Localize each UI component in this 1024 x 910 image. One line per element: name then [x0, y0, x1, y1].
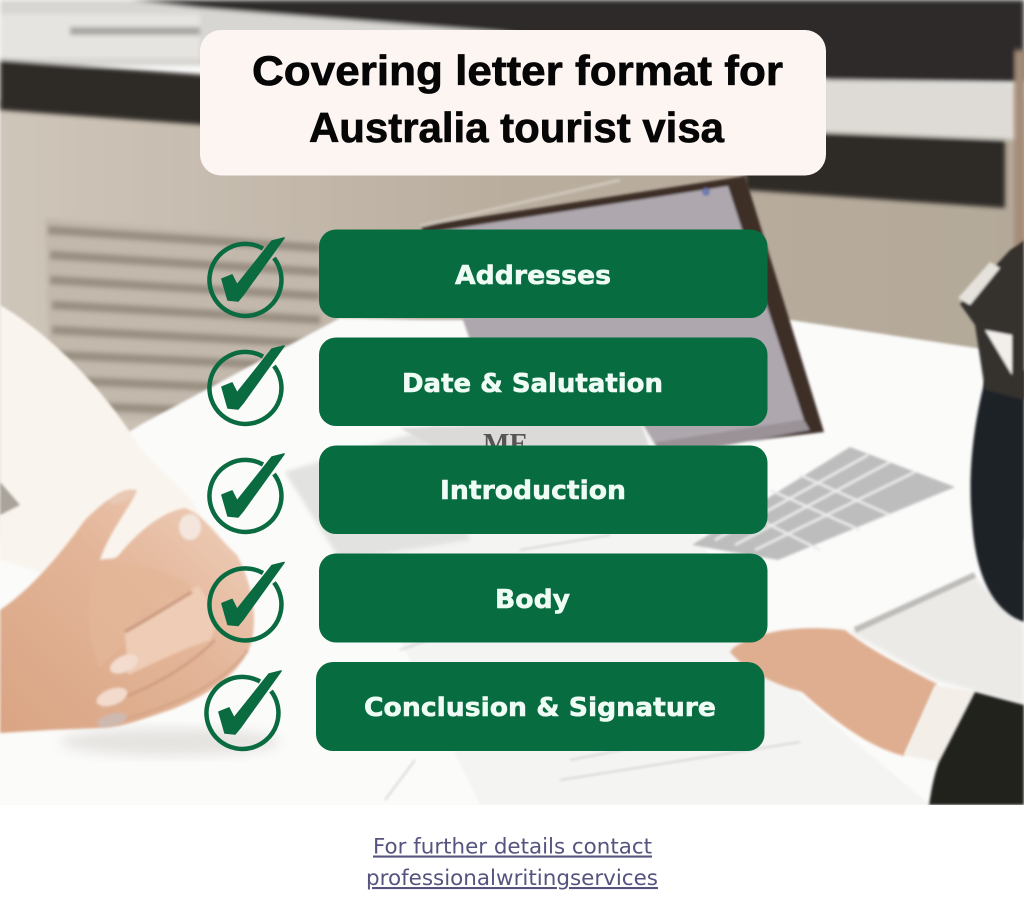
left hands — [0, 487, 254, 733]
left sleeve — [0, 305, 198, 572]
label: date and salutation: Date & Salutation — [402, 369, 663, 399]
title line 1: Covering letter format for — [252, 47, 783, 94]
label: introduction: Introduction — [440, 476, 626, 506]
icon: check mark 4 — [209, 562, 284, 640]
laptop keyboard — [692, 447, 955, 560]
bar: conclusion and signature — [316, 662, 764, 751]
desk shadow under hands — [60, 728, 280, 756]
footer line 2: professionalwritingservices — [366, 866, 658, 890]
bar: introduction — [319, 446, 768, 534]
shirt cuff — [904, 685, 975, 762]
title card — [200, 30, 826, 176]
checklist item 3: introduction — [209, 446, 768, 534]
label: body: Body — [495, 585, 570, 615]
window ledge and dark bands — [0, 0, 1024, 208]
bar: body — [319, 554, 768, 642]
desk shade right — [850, 578, 1024, 705]
document heading in photo: ME — [483, 429, 528, 460]
checklist item 4: body — [209, 554, 768, 642]
label: conclusion and signature: Conclusion & Signature — [364, 693, 716, 723]
checklist item 1: addresses — [209, 230, 768, 318]
title line 2: Australia tourist visa — [309, 104, 725, 151]
wall vent with slats — [45, 218, 320, 420]
footer contact link — [366, 834, 658, 890]
document on desk — [640, 426, 658, 446]
desk surface — [0, 318, 985, 542]
checklist item 2: date and salutation — [209, 338, 768, 426]
label: addresses: Addresses — [455, 261, 611, 291]
icon: check mark 1 — [209, 238, 284, 316]
icon: check mark 2 — [209, 346, 284, 424]
icon: check mark 3 — [209, 454, 284, 532]
dark bag — [971, 370, 1024, 622]
bar: date and salutation — [319, 338, 768, 426]
dark suit sleeve — [929, 692, 1024, 805]
icon: check mark 5 — [206, 671, 281, 749]
checklist item 5: conclusion and signature — [206, 662, 765, 751]
laptop front edge — [855, 575, 975, 630]
bar: addresses — [319, 230, 768, 318]
wall — [0, 100, 1024, 540]
glasses and person edge — [958, 50, 1024, 400]
right hand holding paper — [730, 628, 937, 756]
footer line 1: For further details contact — [373, 834, 652, 858]
laptop — [420, 176, 824, 452]
